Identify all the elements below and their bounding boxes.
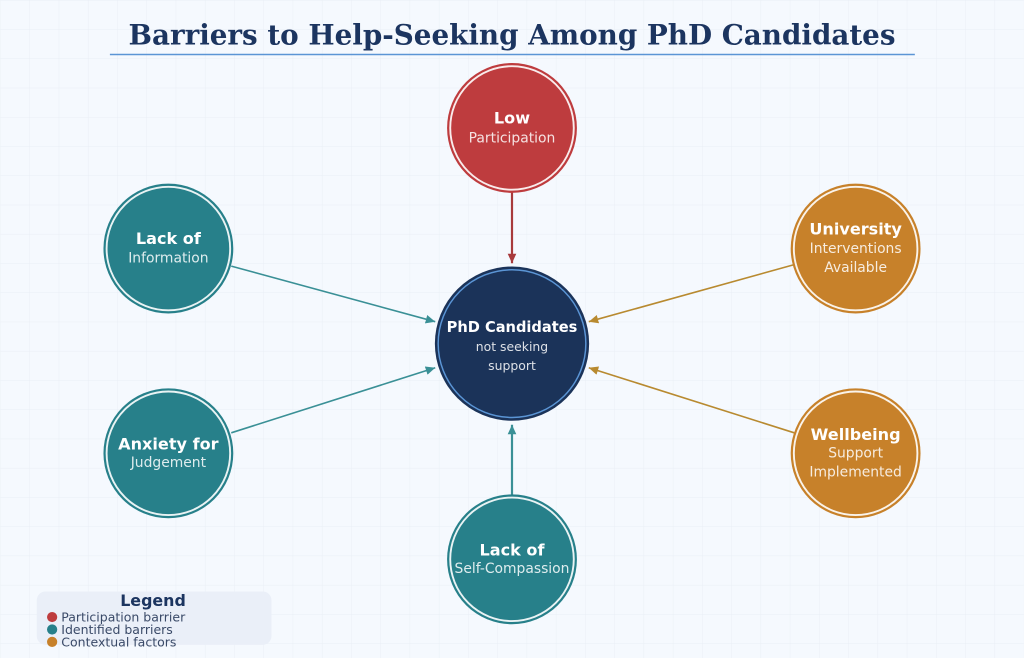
legend: Legend bbox=[120, 591, 186, 610]
centre node: PhD Candidates: PhD Candidates bbox=[447, 319, 577, 336]
node: University Interventions Available: University bbox=[809, 220, 902, 239]
node: Lack of Self-Compassion: Lack of bbox=[480, 541, 545, 560]
node: University Interventions Available bbox=[791, 184, 921, 314]
title: Barriers to Help-Seeking Among PhD Candidates bbox=[129, 19, 895, 52]
node: Anxiety for Judgement: Anxiety for bbox=[118, 435, 219, 454]
node: Anxiety for Judgement: Judgement bbox=[130, 455, 207, 471]
node: Low Participation bbox=[447, 63, 577, 193]
centre node: PhD Candidates: support bbox=[488, 358, 536, 373]
arrow: lack of information to centre bbox=[231, 266, 435, 322]
node: Wellbeing Support Implemented: Wellbeing bbox=[811, 425, 901, 444]
node: Low Participation: Low bbox=[494, 109, 530, 128]
arrow: low participation to centre bbox=[510, 192, 514, 263]
legend bbox=[37, 591, 271, 649]
node: Wellbeing Support Implemented bbox=[791, 388, 921, 518]
legend item: identified barriers: Identified barriers bbox=[61, 622, 173, 637]
node: Wellbeing Support Implemented: Implemented bbox=[809, 465, 902, 481]
node: Lack of Self-Compassion bbox=[447, 494, 577, 624]
node: University Interventions Available: Interventions bbox=[810, 241, 902, 257]
node: Wellbeing Support Implemented: Support bbox=[828, 446, 884, 462]
legend item: contextual factors: Contextual factors bbox=[61, 634, 176, 649]
centre node: PhD Candidates: not seeking bbox=[476, 339, 548, 354]
node: Anxiety for Judgement bbox=[103, 388, 233, 518]
legend item: participation barrier: Participation barrier bbox=[61, 609, 186, 624]
node: University Interventions Available: Available bbox=[824, 260, 887, 276]
node: Low Participation: Participation bbox=[469, 131, 555, 147]
arrow: wellbeing support to centre bbox=[589, 368, 794, 433]
node: Lack of Information bbox=[103, 184, 233, 314]
arrow: university interventions to centre bbox=[589, 265, 794, 322]
node: Lack of Information: Information bbox=[128, 250, 209, 266]
node: Lack of Information: Lack of bbox=[136, 229, 202, 248]
arrow: self-compassion to centre bbox=[510, 425, 514, 496]
centre node: PhD Candidates bbox=[435, 266, 589, 421]
arrow: anxiety to centre bbox=[231, 368, 435, 433]
node: Lack of Self-Compassion: Self-Compassion bbox=[455, 561, 569, 577]
